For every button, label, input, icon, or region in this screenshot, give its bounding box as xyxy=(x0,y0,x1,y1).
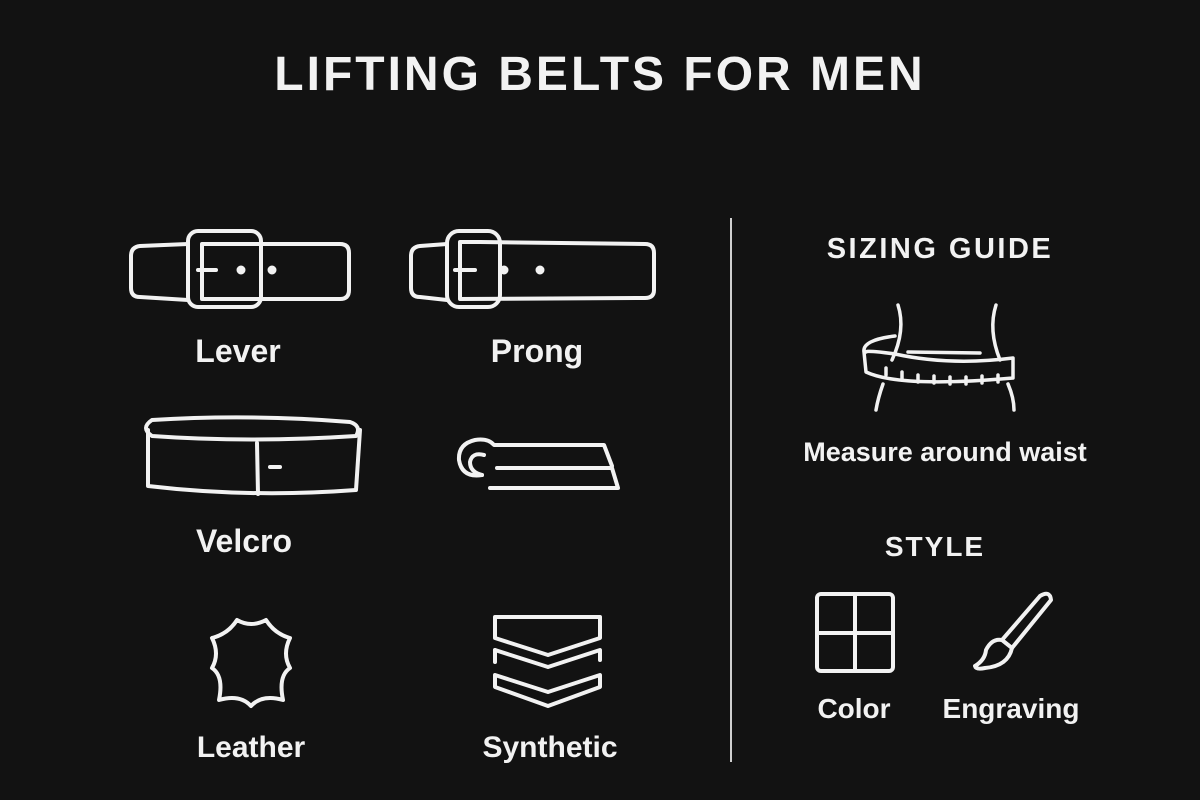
icon: brush xyxy=(975,594,1051,669)
label: Lever: Lever xyxy=(195,333,281,369)
label: Velcro: Velcro xyxy=(196,523,292,559)
label: measure: Measure around waist xyxy=(803,437,1087,467)
icon: prong belt xyxy=(411,231,654,307)
icon: synthetic layers xyxy=(495,617,600,706)
icon: color grid xyxy=(817,594,893,671)
icon: waist measure xyxy=(864,305,1014,410)
label: engraving: Engraving xyxy=(943,693,1079,724)
icon: lever belt xyxy=(131,231,349,307)
label: color: Color xyxy=(817,693,891,724)
label: Synthetic: Synthetic xyxy=(482,731,618,764)
label: Leather: Leather xyxy=(197,731,306,764)
heading: sizing guide: SIZING GUIDE xyxy=(827,233,1053,265)
label: Prong: Prong xyxy=(491,333,583,369)
icon: leather hide xyxy=(212,620,290,706)
heading: style: STYLE xyxy=(885,531,985,562)
icon: scroll strap xyxy=(459,440,618,488)
title: LIFTING BELTS FOR MEN xyxy=(274,48,926,101)
icon: velcro belt xyxy=(146,417,360,494)
